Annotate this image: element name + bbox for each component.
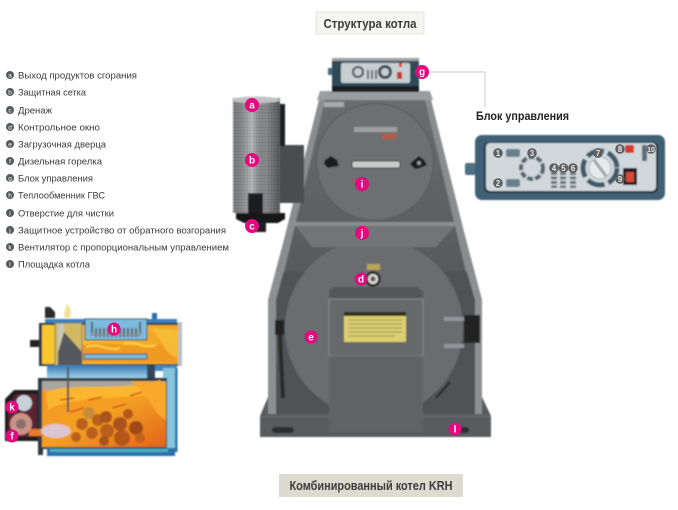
upper body bbox=[276, 100, 474, 272]
legend item f: f bbox=[9, 158, 11, 166]
number 3 bbox=[527, 148, 537, 158]
title: Структура котла bbox=[324, 17, 417, 31]
title bbox=[316, 12, 424, 34]
legend item k: k bbox=[8, 244, 12, 252]
connector line from g to control panel bbox=[430, 72, 485, 107]
badge e: e bbox=[308, 332, 314, 344]
badge h: h bbox=[111, 324, 117, 336]
legend item c: Дренаж bbox=[18, 106, 53, 116]
badge k bbox=[6, 400, 18, 414]
legend item d: Контрольное окно bbox=[18, 122, 100, 134]
cleaning door bbox=[316, 104, 434, 220]
sight window bbox=[366, 272, 380, 286]
number 10: 10 bbox=[647, 147, 655, 154]
bottom caption: Комбинированный котел KRH bbox=[290, 479, 452, 493]
number 7: 7 bbox=[596, 149, 601, 158]
badge j bbox=[355, 226, 369, 240]
oil burner bbox=[29, 429, 43, 436]
legend item i: Отверстие для чистки bbox=[18, 208, 114, 220]
timer dial bbox=[521, 157, 543, 179]
badge c bbox=[245, 219, 259, 233]
badge b bbox=[245, 153, 259, 167]
legend item g: Блок управления bbox=[18, 174, 93, 184]
number 2 bbox=[493, 178, 503, 188]
small indicators bbox=[506, 149, 520, 157]
number 9: 9 bbox=[618, 175, 623, 184]
number 4 bbox=[549, 163, 559, 173]
number 2: 2 bbox=[496, 179, 501, 188]
number 5 bbox=[559, 163, 568, 173]
number 9 bbox=[615, 174, 625, 184]
number 7 bbox=[593, 148, 603, 158]
legend item c: c bbox=[8, 108, 12, 114]
number 3: 3 bbox=[530, 149, 535, 158]
legend item j: j bbox=[8, 228, 11, 234]
boiler cutaway diagram bbox=[5, 303, 182, 456]
door handle bbox=[352, 161, 400, 168]
lower chamber bbox=[38, 378, 167, 449]
heat exchanger tank bbox=[85, 319, 147, 340]
legend item e: Загрузочная дверца bbox=[18, 140, 107, 150]
door logo text bbox=[354, 127, 397, 132]
badge k: k bbox=[9, 402, 15, 414]
control panel detail bbox=[465, 135, 665, 200]
hinge right bbox=[464, 315, 480, 343]
legend item a: a bbox=[8, 72, 12, 80]
badge j: j bbox=[360, 228, 364, 240]
legend item d: d bbox=[8, 124, 12, 132]
legend item f: Дизельная горелка bbox=[18, 156, 103, 168]
number 8: 8 bbox=[618, 145, 623, 154]
lower body bbox=[268, 240, 482, 414]
burner housing bbox=[5, 390, 38, 441]
number 8 bbox=[615, 144, 625, 154]
badge c: c bbox=[249, 222, 255, 232]
legend item b: b bbox=[8, 90, 12, 96]
middle water jacket bbox=[47, 365, 155, 379]
lower door bbox=[285, 239, 463, 417]
badge i bbox=[355, 177, 369, 191]
smoke bbox=[64, 303, 71, 318]
shelf bbox=[293, 222, 458, 247]
badge b: b bbox=[249, 156, 255, 166]
upper shell bbox=[45, 319, 177, 366]
warning label bbox=[344, 312, 406, 342]
badge g bbox=[415, 65, 429, 79]
control box on boiler bbox=[332, 58, 419, 92]
badge l bbox=[448, 422, 462, 436]
number 5: 5 bbox=[561, 164, 566, 173]
boiler photo bbox=[232, 58, 491, 437]
flue baffle bbox=[84, 354, 147, 359]
legend item g: g bbox=[8, 176, 12, 182]
chimney base bbox=[236, 213, 285, 223]
right knob bbox=[410, 156, 427, 169]
bottom jacket bbox=[47, 448, 175, 456]
right pipe bbox=[155, 365, 177, 371]
latch hardware left bbox=[275, 320, 284, 335]
legend item e: e bbox=[8, 142, 12, 148]
upper plate label bbox=[324, 102, 344, 107]
number 1: 1 bbox=[496, 149, 501, 158]
badge a: a bbox=[249, 100, 255, 112]
badge d bbox=[354, 272, 368, 286]
number 10 bbox=[646, 144, 656, 154]
legend item k: Вентилятор с пропорциональным управлением bbox=[18, 242, 229, 254]
badge g: g bbox=[419, 67, 425, 78]
badge i: i bbox=[361, 180, 364, 190]
number 4: 4 bbox=[552, 164, 557, 173]
legend item i: i bbox=[9, 210, 11, 218]
number 6 bbox=[568, 163, 578, 173]
badge h bbox=[108, 322, 120, 336]
legend item h: h bbox=[8, 192, 12, 200]
base platform bbox=[260, 397, 491, 437]
legend item j: Защитное устройство от обратного возгорания bbox=[18, 226, 226, 236]
badge f bbox=[6, 430, 18, 442]
mode dial bbox=[583, 151, 617, 185]
wood logs bbox=[71, 407, 145, 446]
cylinder bbox=[55, 323, 82, 367]
indicator columns bbox=[554, 172, 573, 188]
bottom caption bbox=[279, 474, 463, 497]
badge e bbox=[304, 330, 318, 344]
switch bbox=[623, 168, 637, 185]
badge l: l bbox=[454, 424, 457, 436]
legend item h: Теплообменник ГВС bbox=[18, 190, 105, 202]
heat exchanger coil bbox=[92, 322, 140, 337]
left knob bbox=[324, 156, 339, 168]
legend item l: l bbox=[9, 262, 11, 268]
component legend bbox=[6, 70, 229, 270]
badge d: d bbox=[358, 274, 364, 286]
probe bbox=[67, 367, 69, 412]
loading hatch bbox=[329, 287, 423, 432]
connector duct bbox=[280, 145, 304, 203]
number 6: 6 bbox=[571, 164, 576, 173]
control panel heading: Блок управления bbox=[476, 111, 569, 123]
flue chimney bbox=[233, 98, 280, 213]
badge a bbox=[245, 98, 259, 112]
number 1 bbox=[493, 148, 503, 158]
top cap bbox=[317, 91, 433, 100]
badge f: f bbox=[10, 432, 14, 442]
legend item a: Выход продуктов сгорания bbox=[18, 70, 137, 82]
legend item l: Площадка котла bbox=[18, 260, 91, 270]
legend item b: Защитная сетка bbox=[18, 88, 87, 98]
